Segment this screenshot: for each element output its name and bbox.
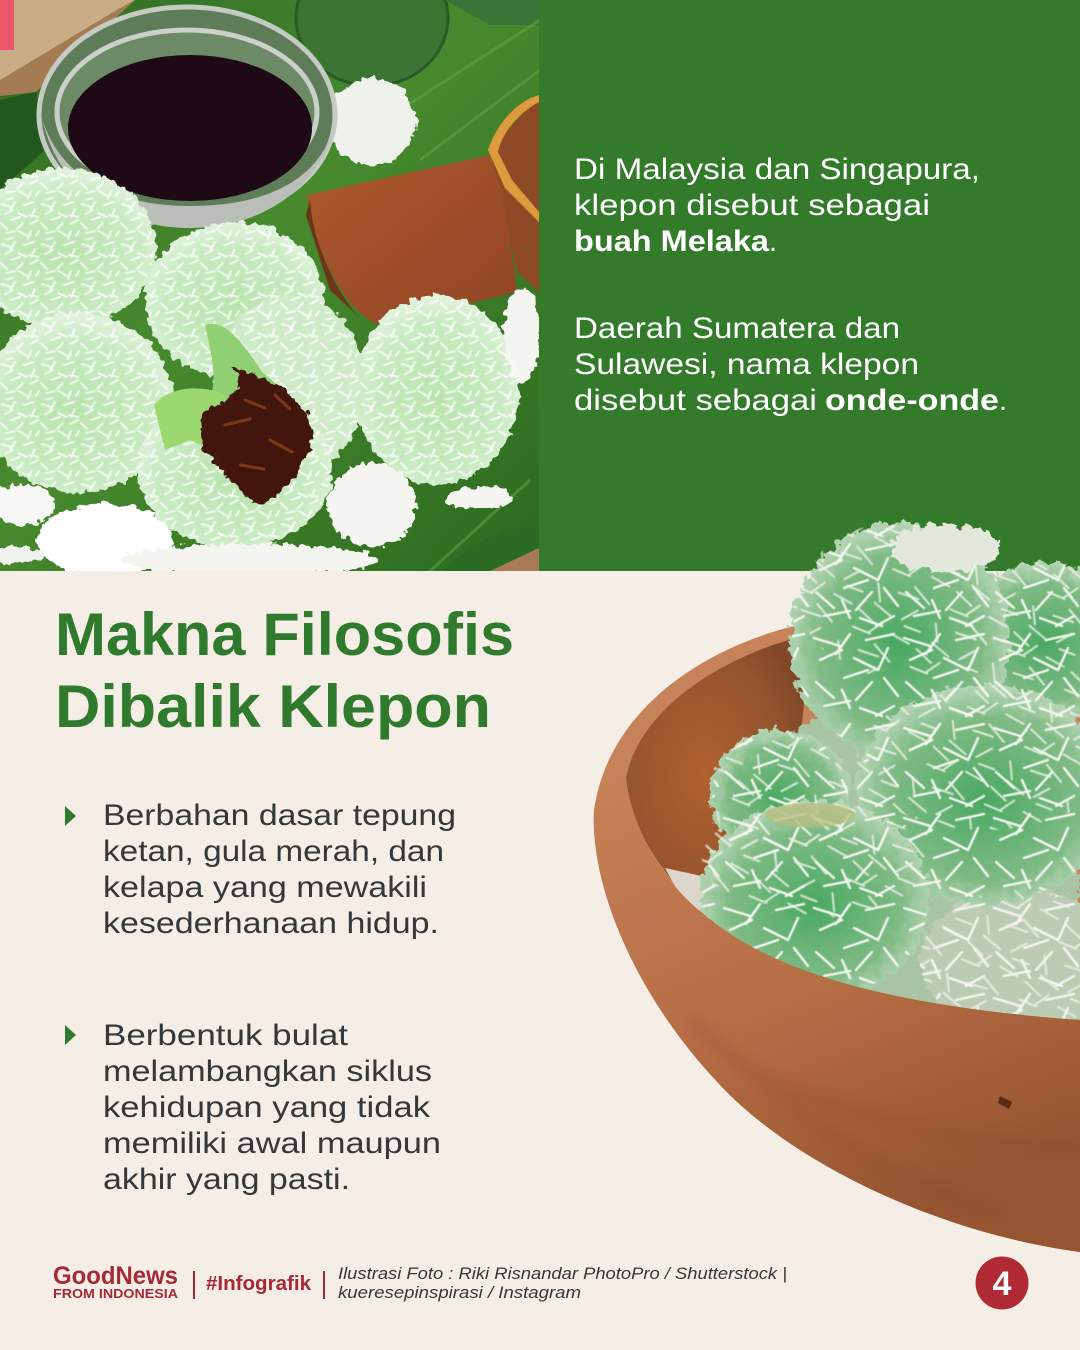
icon: bullet arrow one bbox=[65, 806, 76, 826]
title bbox=[55, 601, 514, 740]
text block: first bullet bbox=[103, 799, 456, 940]
text block: Malaysia and Singapura: klepon disebut sebagai bbox=[574, 189, 930, 222]
text block: first bullet: Berbahan dasar tepung bbox=[103, 799, 456, 832]
page number badge: 4 bbox=[993, 1265, 1012, 1303]
title: Makna Filosofis bbox=[55, 601, 514, 668]
text block: Sumatera and Sulawesi: Sulawesi, nama klepon bbox=[574, 348, 919, 381]
text block: Malaysia and Singapura: buah Melaka bbox=[574, 225, 769, 258]
text block: Sumatera and Sulawesi bbox=[574, 312, 1007, 417]
photo credit bbox=[338, 1264, 787, 1302]
text block: second bullet: memiliki awal maupun bbox=[103, 1127, 441, 1160]
hashtag: #Infografik bbox=[206, 1273, 312, 1295]
icon: bullet arrow two bbox=[65, 1025, 76, 1045]
text block: Sumatera and Sulawesi: onde-onde bbox=[825, 384, 999, 417]
text block: second bullet: Berbentuk bulat bbox=[103, 1019, 349, 1052]
text block: Sumatera and Sulawesi: Daerah Sumatera dan bbox=[574, 312, 900, 345]
text block: first bullet: kesederhanaan hidup. bbox=[103, 907, 439, 940]
text block: Malaysia and Singapura bbox=[574, 153, 980, 258]
logo: GoodNews from Indonesia bbox=[53, 1262, 178, 1301]
text block: Malaysia and Singapura: . bbox=[769, 225, 777, 258]
photo credit: kueresepinspirasi / Instagram bbox=[338, 1283, 581, 1302]
text block: Malaysia and Singapura: Di Malaysia dan Singapura, bbox=[574, 153, 980, 186]
logo: GoodNews from Indonesia: GoodNews bbox=[53, 1262, 178, 1290]
text block: Sumatera and Sulawesi: disebut sebagai bbox=[574, 384, 817, 417]
logo: GoodNews from Indonesia: FROM INDONESIA bbox=[53, 1287, 178, 1301]
divider bbox=[323, 1271, 325, 1299]
text block: Sumatera and Sulawesi: . bbox=[999, 384, 1007, 417]
text block: second bullet: akhir yang pasti. bbox=[103, 1163, 350, 1196]
title: Dibalik Klepon bbox=[55, 673, 491, 740]
page number badge bbox=[976, 1256, 1028, 1310]
text block: second bullet: kehidupan yang tidak bbox=[103, 1091, 431, 1124]
divider bbox=[193, 1271, 195, 1299]
photo credit: Ilustrasi Foto : Riki Risnandar PhotoPro / Shutterstock | bbox=[338, 1264, 787, 1283]
text block: first bullet: ketan, gula merah, dan bbox=[103, 835, 444, 868]
panel: green text panel bbox=[539, 0, 1080, 571]
text block: second bullet bbox=[103, 1019, 441, 1196]
photo: klepon on banana leaf bbox=[0, 0, 540, 576]
text block: first bullet: kelapa yang mewakili bbox=[103, 871, 427, 904]
text block: second bullet: melambangkan siklus bbox=[103, 1055, 432, 1088]
photo: klepon in wooden bowl bbox=[594, 522, 1080, 1252]
